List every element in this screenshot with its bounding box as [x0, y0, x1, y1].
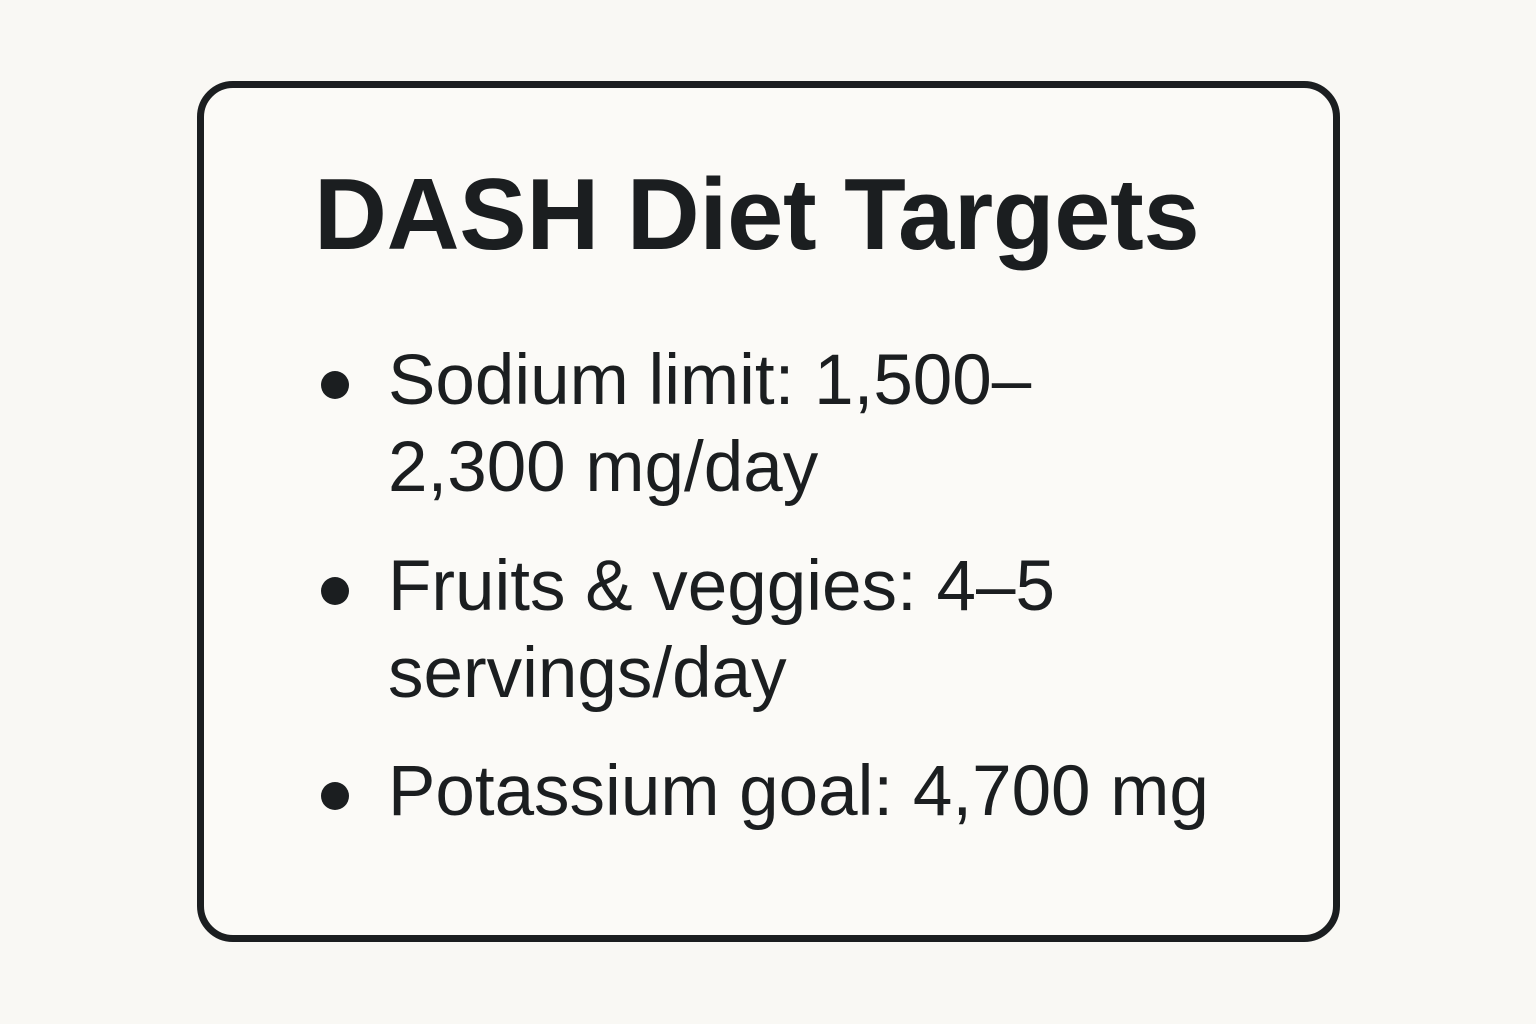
bullet: fruits: Fruits & veggies: 4–5: [388, 547, 1055, 626]
bullet: potassium: Potassium goal: 4,700 mg: [388, 752, 1209, 831]
panel: card: [197, 81, 1340, 942]
bullet: sodium: [321, 341, 1032, 507]
bullet: fruits: [321, 547, 1055, 713]
bullet: sodium: Sodium limit: 1,500–: [388, 341, 1031, 420]
title: DASH Diet Targets: [314, 159, 1199, 271]
bullet: fruits: servings/day: [388, 634, 787, 713]
bullet: sodium: 2,300 mg/day: [388, 428, 818, 507]
